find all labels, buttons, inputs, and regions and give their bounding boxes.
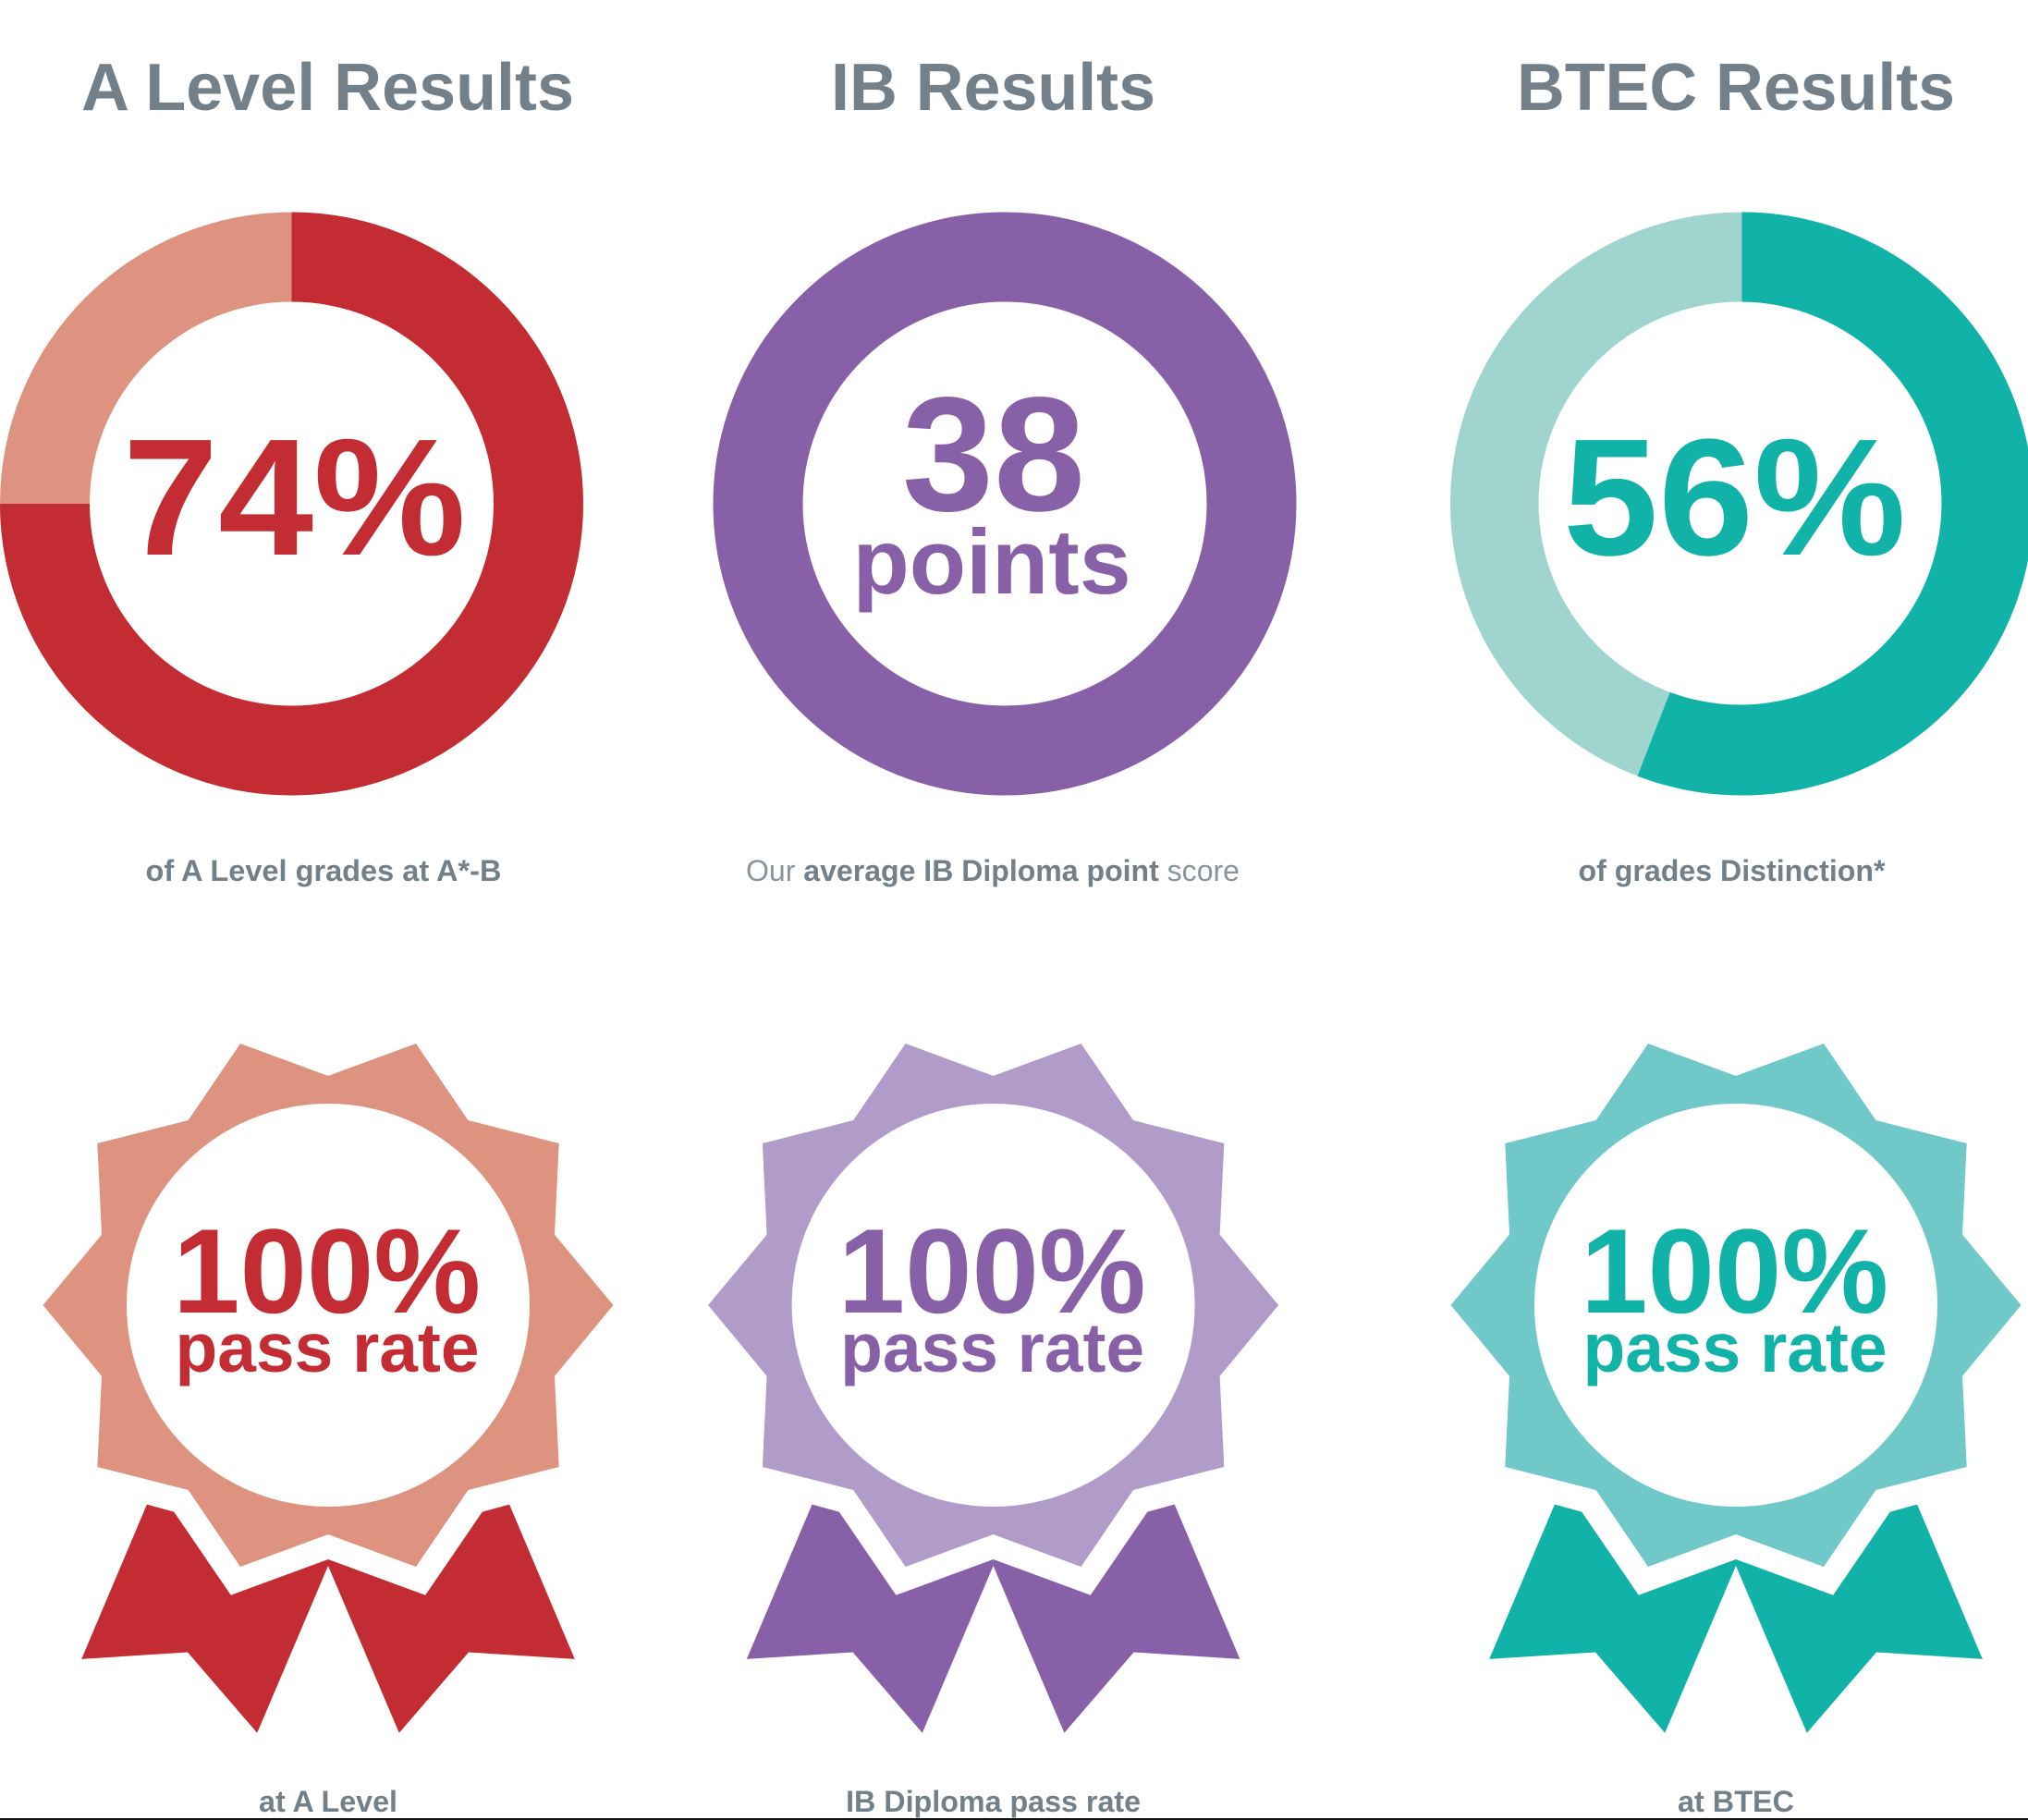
heading: A Level Results: A Level Results xyxy=(81,51,574,125)
stat: 38: 38 xyxy=(902,364,1085,545)
stat label: pass rate: pass rate xyxy=(1582,1309,1888,1386)
stat: 56%: 56% xyxy=(1563,405,1906,591)
caption: IB Diploma pass rate: IB Diploma pass rate xyxy=(846,1785,1141,1818)
donut chart: 56% xyxy=(1450,213,2028,795)
icon: ribbon xyxy=(747,1505,1240,1733)
panel: A Level results xyxy=(0,51,614,1818)
badge: BTEC pass rate xyxy=(1451,1044,2021,1733)
stat: 74%: 74% xyxy=(123,405,466,591)
caption: at BTEC: at BTEC xyxy=(1678,1785,1794,1818)
stat: 100%: 100% xyxy=(838,1203,1146,1338)
stat label: pass rate: pass rate xyxy=(176,1309,479,1386)
icon: rosette xyxy=(43,1044,614,1567)
icon: ribbon xyxy=(81,1505,575,1733)
stat: 100%: 100% xyxy=(173,1203,481,1338)
badge: IB pass rate xyxy=(708,1044,1278,1733)
caption: at A Level: at A Level xyxy=(259,1785,397,1818)
panel: IB results xyxy=(708,51,1278,1818)
caption: grades Distinction: of grades Distinction* xyxy=(1579,854,1886,887)
panel: BTEC results xyxy=(1450,51,2028,1818)
icon: rosette xyxy=(1451,1044,2021,1567)
caption: IB Diploma average: Our average IB Diploma point score xyxy=(746,854,1240,887)
icon: ribbon xyxy=(1489,1505,1983,1733)
heading: IB Results: IB Results xyxy=(831,51,1155,125)
stat label: pass rate: pass rate xyxy=(840,1309,1144,1386)
donut chart: full ring xyxy=(758,257,1252,751)
stat: 100%: 100% xyxy=(1581,1203,1888,1338)
icon: rosette xyxy=(708,1044,1278,1567)
heading: BTEC Results: BTEC Results xyxy=(1517,51,1955,125)
stat label: points: points xyxy=(852,510,1131,613)
caption: A Level grades: of A Level grades at A*-B xyxy=(146,854,501,887)
badge: A Level pass rate xyxy=(43,1044,614,1733)
donut chart: 74% xyxy=(0,213,583,796)
